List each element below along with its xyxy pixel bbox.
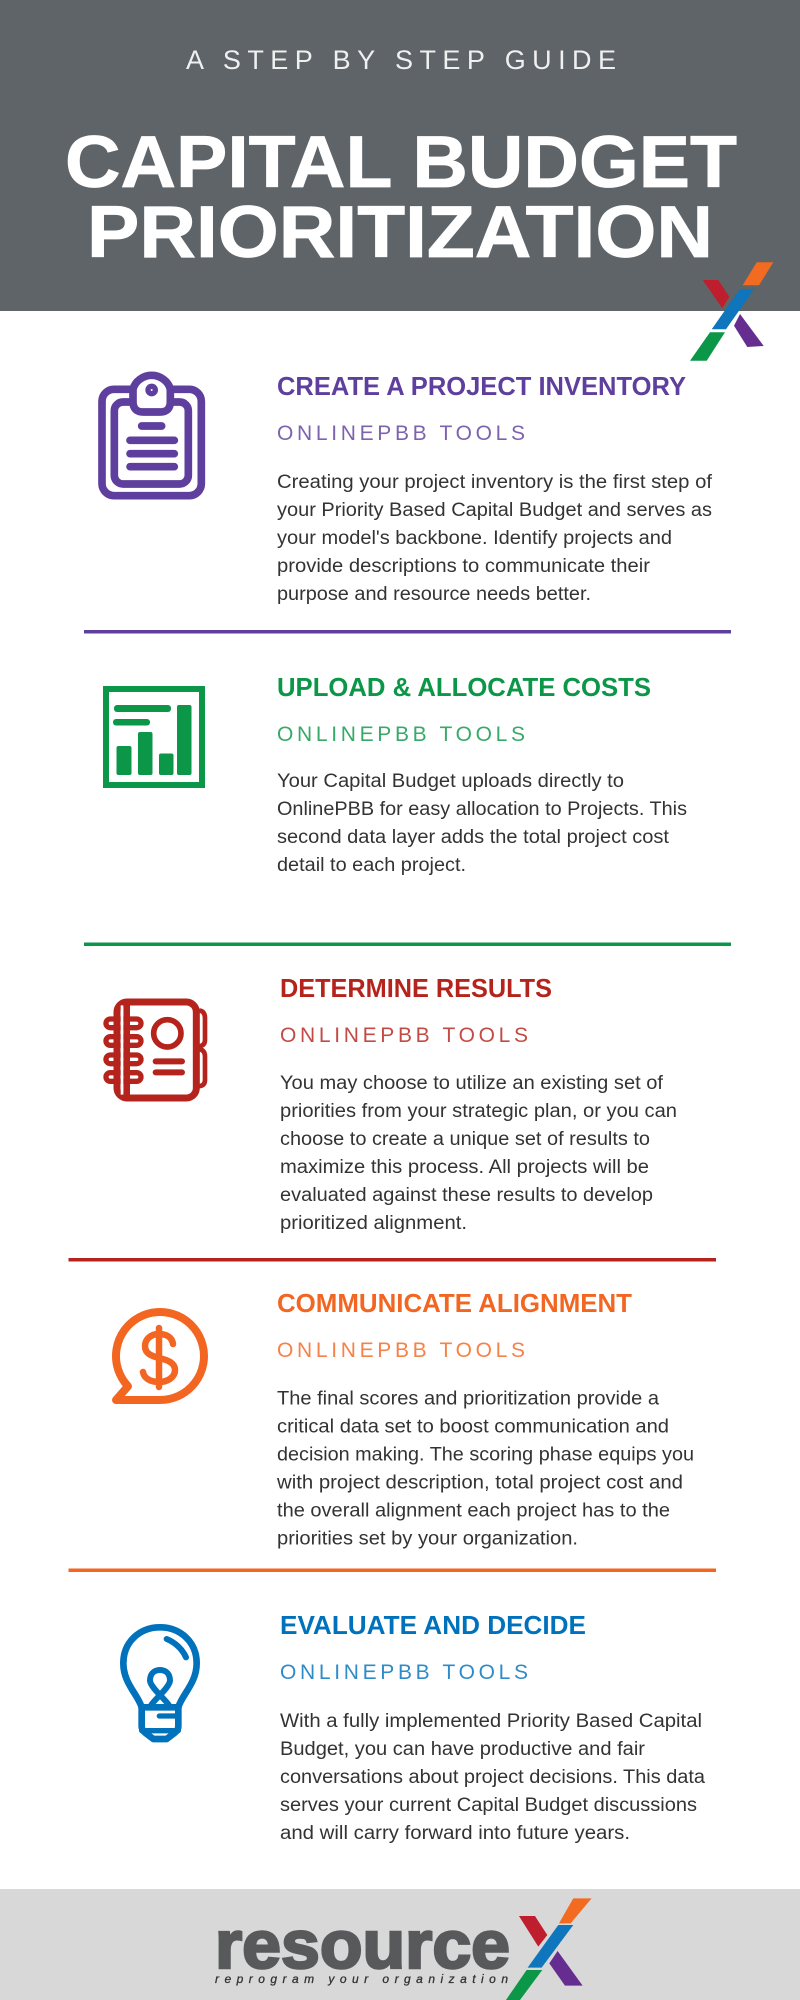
body text: serves your current Capital Budget discussions <box>280 1795 697 1816</box>
body text: maximize this process. All projects will be <box>280 1157 649 1178</box>
body text: provide descriptions to communicate their <box>277 556 651 577</box>
body text <box>280 1711 705 1844</box>
body text: prioritized alignment. <box>280 1213 467 1234</box>
body text: OnlinePBB for easy allocation to Projects. This <box>277 799 687 820</box>
body text: purpose and resource needs better. <box>277 584 591 605</box>
heading: COMMUNICATE ALIGNMENT <box>277 1288 632 1318</box>
heading: EVALUATE AND DECIDE <box>280 1610 586 1640</box>
subheading: ONLINEPBB TOOLS <box>280 1661 528 1684</box>
subheading: ONLINEPBB TOOLS <box>277 723 525 746</box>
panel: step 1 create a project inventory <box>102 371 713 605</box>
body text: critical data set to boost communication and <box>277 1416 669 1438</box>
body text <box>277 771 687 876</box>
body text: the overall alignment each project has to the <box>277 1500 670 1522</box>
icon: clipboard <box>102 375 201 496</box>
body text: conversations about project decisions. This data <box>280 1767 705 1788</box>
panel: step 2 upload and allocate costs <box>106 672 687 876</box>
title: CAPITAL BUDGET <box>65 122 737 203</box>
panel: step 4 communicate alignment <box>116 1288 694 1550</box>
panel: footer with resourceX logo <box>0 1889 800 2000</box>
body text: priorities set by your organization. <box>277 1528 578 1550</box>
body text: detail to each project. <box>277 855 466 876</box>
body text: with project description, total project cost and <box>276 1472 683 1494</box>
icon: spiral notebook <box>106 1002 205 1098</box>
title <box>65 122 737 273</box>
body text: second data layer adds the total project cost <box>277 827 670 848</box>
body text: evaluated against these results to develop <box>280 1185 653 1206</box>
title: PRIORITIZATION <box>87 192 713 273</box>
body text: and will carry forward into future years. <box>280 1823 630 1844</box>
body text: With a fully implemented Priority Based Capital <box>280 1711 702 1732</box>
body text: Your Capital Budget uploads directly to <box>277 771 624 792</box>
body text <box>276 1388 694 1550</box>
icon: bar chart report <box>106 689 202 785</box>
logo tagline: reprogram your organization <box>215 1972 508 1986</box>
body text: The final scores and prioritization provide a <box>277 1388 659 1410</box>
icon: light bulb <box>123 1627 197 1739</box>
icon: coloured X logo <box>690 262 773 361</box>
body text: You may choose to utilize an existing set of <box>280 1073 664 1094</box>
panel: step 3 determine results <box>106 973 677 1234</box>
kicker: a step by step guide: A STEP BY STEP GUIDE <box>186 45 616 75</box>
body text: Budget, you can have productive and fair <box>280 1739 646 1760</box>
body text: choose to create a unique set of results to <box>280 1129 650 1150</box>
heading: DETERMINE RESULTS <box>280 973 552 1003</box>
body text: Creating your project inventory is the first step of <box>277 472 713 493</box>
body text <box>280 1073 677 1234</box>
logo wordmark: resource: resource <box>215 1907 510 1983</box>
body text: decision making. The scoring phase equips you <box>277 1444 694 1466</box>
body text: your Priority Based Capital Budget and serves as <box>277 500 712 521</box>
subheading: ONLINEPBB TOOLS <box>277 422 525 445</box>
body text: priorities from your strategic plan, or you can <box>280 1101 677 1122</box>
body text <box>277 472 713 605</box>
heading: CREATE A PROJECT INVENTORY <box>277 371 686 401</box>
icon: footer coloured X <box>506 1898 592 2000</box>
heading: UPLOAD & ALLOCATE COSTS <box>277 672 651 702</box>
body text: your model's backbone. Identify projects and <box>277 528 672 549</box>
subheading: ONLINEPBB TOOLS <box>280 1024 528 1047</box>
panel: header banner <box>0 0 800 311</box>
icon: speech bubble with dollar sign <box>116 1312 204 1400</box>
panel: step 5 evaluate and decide <box>123 1610 705 1844</box>
subheading: ONLINEPBB TOOLS <box>277 1339 525 1362</box>
